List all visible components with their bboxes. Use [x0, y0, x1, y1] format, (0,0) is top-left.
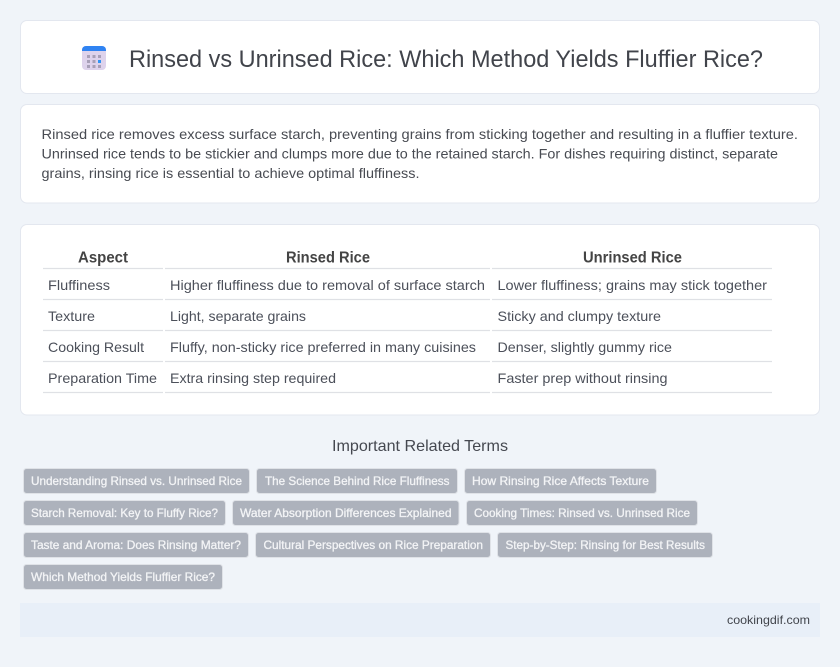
tag	[498, 532, 712, 558]
table header: Unrinsed Rice	[583, 250, 682, 266]
text block: introduction: Rinsed rice removes excess surface starch, preventing grains from sticking together and resulting in a fluffier texture.	[42, 126, 798, 142]
table row: preparation time: Preparation Time	[48, 370, 157, 386]
panel: related term tags	[24, 468, 712, 590]
table row: fluffiness: Higher fluffiness due to removal of surface starch	[170, 277, 485, 293]
tag	[24, 500, 226, 526]
table header: Rinsed Rice	[286, 250, 370, 266]
table row: texture: Sticky and clumpy texture	[498, 308, 661, 324]
tag: Taste and Aroma: Does Rinsing Matter?	[31, 538, 241, 552]
table row: preparation time	[48, 370, 668, 386]
tag	[232, 500, 459, 526]
tag	[256, 532, 490, 558]
tag: Step-by-Step: Rinsing for Best Results	[506, 538, 705, 552]
tag: Water Absorption Differences Explained	[240, 506, 452, 520]
tag: How Rinsing Rice Affects Texture	[472, 474, 649, 488]
table row: cooking result: Cooking Result	[48, 339, 144, 355]
title: Rinsed vs Unrinsed Rice: Which Method Yields Fluffier Rice?	[129, 46, 763, 73]
panel: comparison table	[20, 224, 820, 415]
table row: cooking result	[48, 339, 672, 355]
table row: texture: Texture	[48, 308, 95, 324]
tag: Which Method Yields Fluffier Rice?	[31, 570, 215, 584]
text block: introduction: grains, rinsing rice is essential to achieve optimal fluffiness.	[42, 165, 420, 181]
table header	[78, 250, 682, 266]
table row: cooking result: Denser, slightly gummy rice	[498, 339, 672, 355]
icon: calendar	[82, 46, 106, 70]
footer: cookingdif.com	[727, 613, 810, 627]
text block: introduction	[42, 126, 798, 181]
panel: introduction	[20, 104, 820, 203]
footer	[20, 603, 820, 637]
table row: texture: Light, separate grains	[170, 308, 306, 324]
tag	[24, 468, 250, 494]
text block: introduction: Unrinsed rice tends to be stickier and clumps more due to the retained starch. For dishes requiring distinct, separate	[42, 146, 778, 162]
tag	[464, 468, 656, 494]
table row: fluffiness	[48, 277, 767, 293]
table row: texture	[48, 308, 661, 324]
tag	[24, 532, 248, 558]
table row: cooking result: Fluffy, non-sticky rice preferred in many cuisines	[170, 339, 476, 355]
tag	[24, 564, 222, 590]
tag	[466, 500, 698, 526]
tag: The Science Behind Rice Fluffiness	[265, 474, 450, 488]
panel: header	[20, 20, 820, 94]
tag	[256, 468, 458, 494]
table row: preparation time: Faster prep without rinsing	[498, 370, 668, 386]
table header: Aspect	[78, 250, 129, 266]
table row: preparation time: Extra rinsing step required	[170, 370, 336, 386]
tag: Cooking Times: Rinsed vs. Unrinsed Rice	[474, 506, 690, 520]
table row: fluffiness: Fluffiness	[48, 277, 110, 293]
table row: fluffiness: Lower fluffiness; grains may stick together	[498, 277, 767, 293]
tag: Understanding Rinsed vs. Unrinsed Rice	[31, 474, 242, 488]
tag: Starch Removal: Key to Fluffy Rice?	[31, 506, 218, 520]
tag: Cultural Perspectives on Rice Preparation	[264, 538, 483, 552]
heading: important related terms: Important Related Terms	[332, 438, 508, 455]
